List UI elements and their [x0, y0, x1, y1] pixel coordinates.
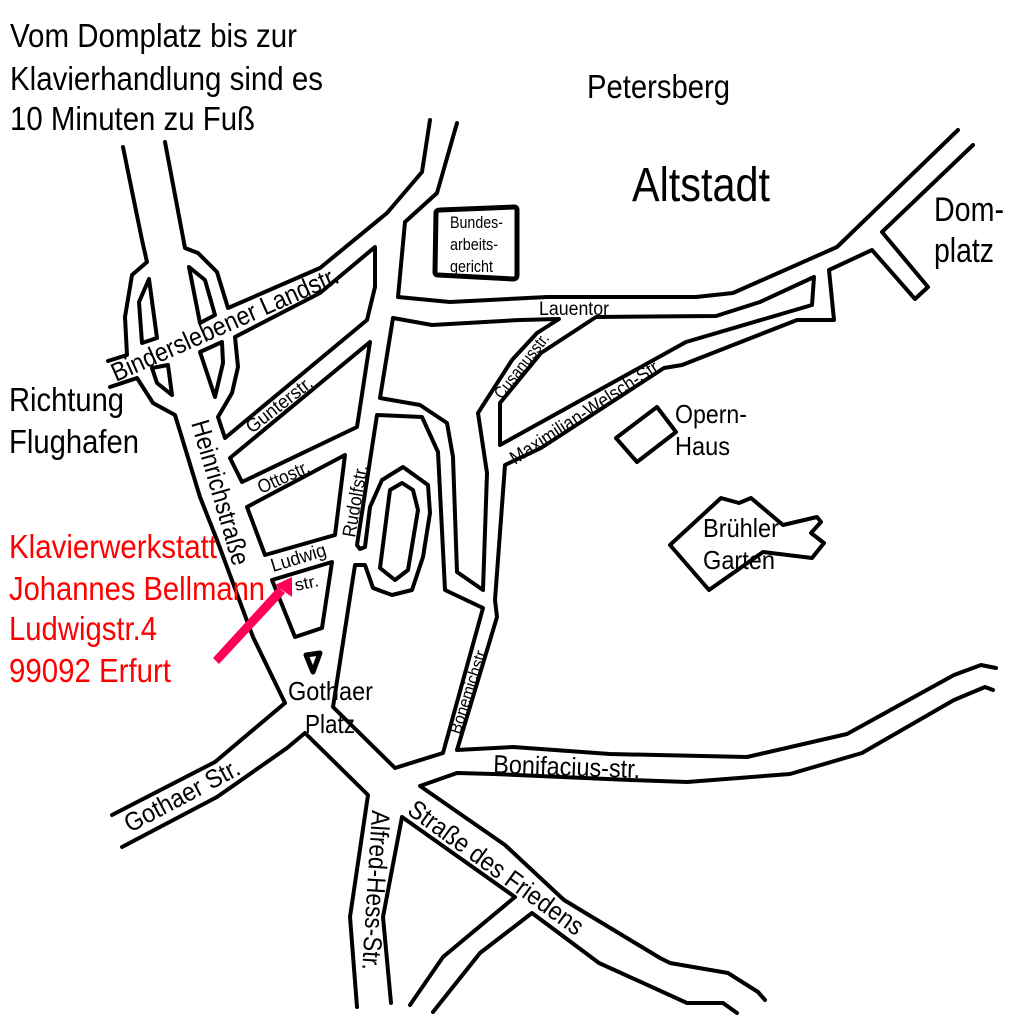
- label: Domplatz: platz: [934, 232, 994, 270]
- label: Bruehler Garten: Garten: [703, 545, 775, 575]
- address block: Klavierwerkstatt: [9, 528, 217, 565]
- address block: Johannes Bellmann: [9, 570, 265, 607]
- address block: 99092 Erfurt: [9, 652, 171, 689]
- road: Gothaer Str. south edge and Alfred-Hess-Str. west edge: [122, 733, 368, 1007]
- block: Ottostr. to Ludwigstr.: [247, 455, 345, 555]
- street label: Ottostr.: Ottostr.: [254, 457, 313, 499]
- label: Richtung Flughafen: Richtung: [9, 381, 124, 418]
- street label: Bonifacius-str.: Bonifacius-str.: [493, 749, 641, 784]
- street label: Gothaer Str.: Gothaer Str.: [119, 752, 245, 838]
- address block: Ludwigstr.4: [9, 610, 157, 647]
- directions note: [10, 17, 323, 137]
- street label: Lauentor: Lauentor: [539, 299, 610, 320]
- street label: Maximilian-Welsch-Str.: Maximilian-Welsch-Str.: [506, 355, 666, 469]
- block: Gothaer Platz to Bonemichstr.: [333, 415, 483, 768]
- oval inner ring: [380, 483, 418, 580]
- label: Gothaer Platz: Gothaer: [288, 676, 373, 706]
- roundabout island 1: [139, 279, 157, 343]
- road: north edge to Domplatz: [398, 123, 958, 302]
- building: Bundesarbeitsgericht: [435, 207, 517, 279]
- label: Bruehler Garten: Brühler: [703, 513, 779, 543]
- roundabout island 3: [200, 342, 223, 397]
- label: Bundesarbeitsgericht: [450, 213, 503, 276]
- block: Lauentor to Maximilian-Welsch-Str.: [500, 277, 814, 445]
- park: Bruehler Garten: [670, 498, 824, 590]
- directions note: Klavierhandlung sind es: [10, 60, 323, 97]
- road: Strasse des Friedens south edge: [433, 913, 737, 1013]
- street label: str.: str.: [293, 571, 320, 595]
- street label: Rudolfstr.: Rudolfstr.: [339, 463, 373, 539]
- directions note: Vom Domplatz bis zur: [10, 17, 297, 54]
- road: northwest right edge and Binderslebener Landstr.: [165, 120, 430, 308]
- block: Gunterstr. to Ottostr.: [230, 342, 370, 482]
- label: Domplatz: Dom-: [934, 191, 1004, 229]
- road: Alfred-Hess-Str. east edge: [383, 817, 515, 1005]
- label: Bundesarbeitsgericht: Bundes-: [450, 213, 503, 232]
- label: Richtung Flughafen: [9, 381, 139, 460]
- block: Lauentor inner: [380, 318, 559, 590]
- label: Bundesarbeitsgericht: gericht: [450, 257, 493, 276]
- label: Domplatz: [934, 191, 1004, 270]
- directions note: 10 Minuten zu Fuß: [10, 100, 255, 137]
- Gothaer Platz small triangle: [306, 653, 320, 672]
- address block: [9, 528, 265, 689]
- roundabout island 4: [152, 365, 172, 395]
- street label: Bonemichstr.: Bonemichstr.: [446, 645, 492, 736]
- label: Bruehler Garten: [703, 513, 779, 575]
- arrow to workshop: [213, 577, 292, 664]
- label: Petersberg: Petersberg: [587, 68, 730, 105]
- street label: Strasse des Friedens: Straße des Friedens: [402, 794, 590, 941]
- street label: Heinrichstrasse: Heinrichstraße: [185, 416, 256, 569]
- street map lines: [108, 120, 996, 1013]
- road: Strasse des Friedens north edge and Bonifacius-str. south edge: [420, 687, 993, 1000]
- street label: Alfred-Hess-Str.: Alfred-Hess-Str.: [356, 810, 396, 971]
- block: Binderslebener to Gunterstr.: [218, 247, 375, 438]
- road: Domplatz lower edge and Maximilian-Welsch-Str.: [457, 145, 996, 757]
- label: Opernhaus: Haus: [675, 431, 730, 461]
- label: Gothaer Platz: [288, 676, 373, 739]
- label: Gothaer Platz: Platz: [305, 709, 355, 739]
- street label: Gunterstr.: Gunterstr.: [242, 373, 317, 438]
- label: Altstadt: Altstadt: [632, 159, 770, 212]
- road: northwest left edge: [108, 147, 147, 361]
- label: Bundesarbeitsgericht: arbeits-: [450, 235, 498, 254]
- label: Richtung Flughafen: Flughafen: [9, 423, 139, 460]
- street label: Cusanusstr.: Cusanusstr.: [490, 329, 553, 402]
- street label: Ludwig: Ludwig: [268, 540, 329, 577]
- building: Opernhaus: [616, 407, 676, 462]
- block: Ludwigstr.: [272, 562, 332, 637]
- label: Opernhaus: [675, 399, 747, 461]
- street label: Binderslebener Landstr.: Binderslebener Landstr.: [106, 260, 343, 387]
- road: Heinrichstrasse west edge: [110, 378, 285, 815]
- roundabout island 2: [189, 267, 215, 323]
- label: Opernhaus: Opern-: [675, 399, 747, 429]
